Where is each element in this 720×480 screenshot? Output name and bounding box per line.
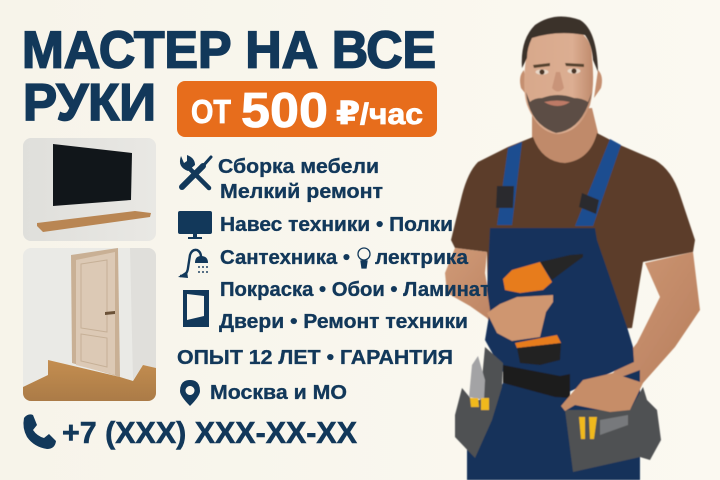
hand holding drill (487, 295, 553, 341)
services list: Мелкий ремонт (220, 180, 383, 203)
location: Москва и МО (210, 381, 347, 404)
phone number: +7 (XXX) XXX-XX-XX (62, 415, 357, 450)
services list: Сантехника • (220, 246, 350, 269)
icon: wrench and screwdriver (180, 155, 211, 188)
services list (218, 155, 490, 333)
icon: plumbing shower (178, 250, 208, 278)
overalls bib (485, 228, 634, 396)
price badge: /час (360, 98, 423, 131)
icon: door (183, 290, 209, 327)
title (22, 22, 436, 132)
photo: door (23, 248, 156, 401)
right tool pouch (565, 387, 661, 472)
lips (544, 100, 570, 106)
neck (532, 108, 598, 165)
beard (526, 92, 592, 133)
icon: light bulb (358, 248, 370, 268)
photo: TV and shelf (23, 138, 156, 241)
drill (503, 254, 583, 365)
experience and guarantee: ОПЫТ 12 ЛЕТ • ГАРАНТИЯ (177, 346, 453, 369)
forearm right (600, 252, 700, 405)
icon: map pin (180, 380, 200, 406)
eyes and brows (533, 63, 584, 68)
buckles (496, 186, 599, 214)
services list: Сборка мебели (218, 155, 379, 178)
nose (552, 72, 564, 92)
title: РУКИ (23, 74, 156, 132)
services list: Навес техники • Полки (220, 213, 453, 236)
price badge: ОТ (191, 93, 231, 130)
strap right (575, 139, 621, 226)
services list: Покраска • Обои • Ламинат (220, 278, 490, 301)
icon: phone (23, 414, 56, 449)
location (180, 380, 347, 406)
price badge: ₽ (336, 95, 360, 131)
title: МАСТЕР НА ВСЕ (22, 22, 436, 80)
services list: лектрика (375, 246, 469, 269)
worker figure (445, 16, 700, 480)
brown t-shirt (451, 133, 695, 330)
hand in pocket (561, 373, 643, 412)
icon: television (178, 211, 212, 239)
price badge: 500 (241, 84, 328, 138)
left tool pouch (455, 347, 503, 458)
trousers (467, 370, 640, 480)
face (524, 26, 593, 134)
belt (503, 365, 570, 398)
ears (520, 70, 602, 98)
strap left (497, 142, 522, 225)
services list: Двери • Ремонт техники (219, 310, 468, 333)
forearm left (445, 248, 522, 340)
price badge (177, 81, 437, 138)
hair (522, 16, 598, 72)
